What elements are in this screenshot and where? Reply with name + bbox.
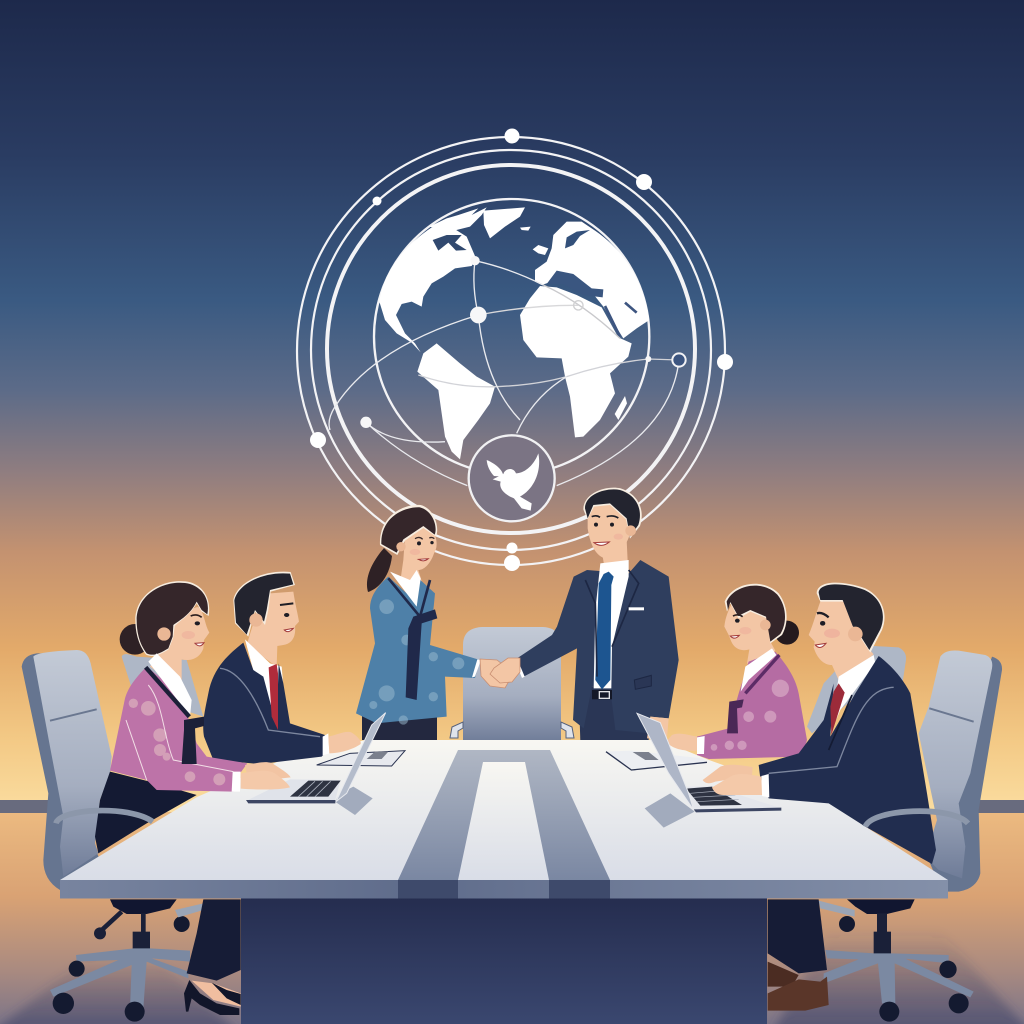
hair <box>135 581 209 656</box>
globe with continents <box>329 199 686 521</box>
eurasia and arabia <box>535 222 649 338</box>
right chair back <box>929 657 1002 892</box>
right foreground: legs and shoes <box>768 899 829 1011</box>
sleeve highlight <box>220 668 320 737</box>
left laptop <box>246 713 386 815</box>
furniture: right office chair and far chair <box>772 646 1024 1024</box>
iceland and britain <box>520 227 548 255</box>
orbit nodes <box>310 128 733 571</box>
centre chair arms <box>450 722 574 738</box>
chair behind second man <box>122 654 203 717</box>
person: seated man right <box>703 583 968 864</box>
shoes <box>768 962 799 987</box>
table centre stripe <box>398 750 610 880</box>
madagascar <box>615 396 627 420</box>
left foreground: legs and shoes <box>184 899 241 1015</box>
keyboard <box>290 781 341 797</box>
face and neck <box>724 602 775 667</box>
head <box>583 488 642 582</box>
laptop base <box>687 787 781 810</box>
emblem: orbit rings and globe <box>297 128 733 571</box>
cuff and hand <box>697 736 705 754</box>
background: dusk sky gradient <box>0 0 1024 812</box>
ponytail <box>367 548 392 592</box>
africa <box>520 286 632 437</box>
mediterranean <box>547 271 603 297</box>
tie <box>830 683 845 735</box>
dove badge <box>469 435 555 521</box>
floor <box>0 812 1024 1024</box>
suit, shirt and tie <box>515 560 679 742</box>
person: seated woman left <box>56 581 291 853</box>
furniture: centre chair <box>450 627 574 742</box>
jacket, sleeve and collar <box>356 570 481 725</box>
face and neck <box>809 597 874 684</box>
hands <box>245 762 291 778</box>
left chair back <box>22 653 100 890</box>
table <box>60 740 948 1024</box>
shirt <box>830 655 875 733</box>
laptop screen <box>637 713 694 810</box>
table pedestal <box>241 898 767 1024</box>
sleeve floral pattern <box>711 680 789 751</box>
collar and ribbon <box>741 648 776 692</box>
neck and shirt <box>245 639 287 727</box>
person: seated woman right <box>666 584 807 759</box>
orbit rings <box>297 137 725 565</box>
chair base left <box>0 899 240 1024</box>
cuff and hand <box>323 733 329 755</box>
chair behind seated man right <box>807 646 906 733</box>
shoes <box>192 981 241 1007</box>
bow tie ribbon <box>182 717 204 764</box>
keyboard <box>686 787 742 806</box>
skirt <box>95 772 197 853</box>
pink jacket <box>110 667 247 792</box>
red sea and gulf <box>605 303 637 337</box>
collar <box>148 653 192 717</box>
right chair armrest <box>865 811 968 827</box>
face and neck <box>150 607 209 690</box>
trousers <box>187 899 241 981</box>
laptop base <box>247 779 341 801</box>
network lines <box>329 261 679 486</box>
hair <box>725 584 787 643</box>
dark skirt <box>362 712 437 740</box>
left tablet <box>317 751 405 766</box>
cuff and hands <box>761 774 769 797</box>
right chair base <box>772 930 1024 1024</box>
furniture: left office chair <box>0 650 240 1024</box>
north america <box>379 224 476 352</box>
table front edge <box>60 880 948 898</box>
baltic gap <box>565 230 590 248</box>
person: seated man left <box>203 572 361 764</box>
hair <box>817 583 885 653</box>
sleeve floral pattern <box>129 699 225 785</box>
jacket <box>759 656 936 864</box>
greenland <box>483 207 525 238</box>
bun <box>775 621 799 645</box>
handshake <box>480 658 520 688</box>
laptop shadow <box>645 793 695 828</box>
laptop screen <box>336 713 386 802</box>
table top <box>60 740 948 880</box>
hudson bay <box>433 235 467 251</box>
right laptop <box>637 713 781 828</box>
horizon band <box>0 800 1024 813</box>
bun <box>120 624 150 655</box>
sleeve seam <box>126 685 233 780</box>
head <box>380 505 437 587</box>
south america <box>417 343 495 459</box>
network nodes <box>360 256 686 428</box>
head <box>247 592 299 667</box>
tie <box>269 664 278 730</box>
jacket <box>203 643 328 764</box>
pink jacket <box>697 652 807 759</box>
left chair armrest <box>56 811 153 823</box>
sleeve highlight <box>769 687 894 773</box>
cuff <box>232 772 241 792</box>
trousers <box>768 899 827 973</box>
laptop shadow <box>335 787 373 815</box>
person: standing woman in blue <box>356 505 481 740</box>
person: standing man in suit <box>515 488 679 742</box>
arctic islands <box>429 207 487 232</box>
right tablet <box>606 751 707 770</box>
